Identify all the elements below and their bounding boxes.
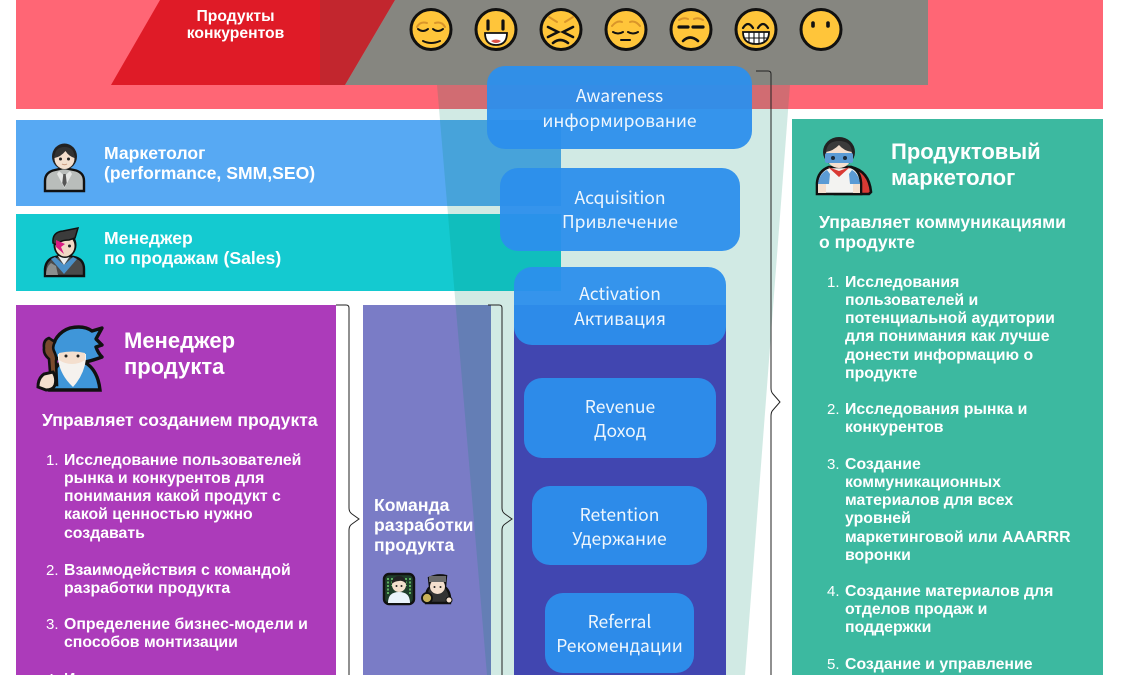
product manager subtitle: Управляет созданием продукта xyxy=(42,410,318,430)
product marketer list item 3: Создание xyxy=(845,456,921,472)
development team label: Команда xyxy=(374,494,449,514)
competitors label xyxy=(187,8,284,42)
panel: product marketer xyxy=(792,119,1103,675)
product manager list item 1: создавать xyxy=(64,524,145,542)
icon: designer xyxy=(421,574,452,604)
product marketer list item 2 xyxy=(827,400,1027,436)
text: 4. xyxy=(827,582,840,600)
competitors products shape xyxy=(111,0,395,85)
funnel stage: activation: Активация xyxy=(574,306,666,330)
icon: wizard xyxy=(36,325,104,392)
band: sales manager xyxy=(16,214,561,291)
product marketer list item 4: отделов продаж и xyxy=(845,601,987,618)
sales manager label: по продажам (Sales) xyxy=(104,248,281,268)
funnel stage: awareness xyxy=(487,66,752,149)
funnel stage: acquisition xyxy=(500,168,740,251)
product marketer list item 3 xyxy=(827,456,1071,564)
sales manager label xyxy=(104,228,281,268)
emoji row xyxy=(410,8,842,51)
competitors label: Продукты xyxy=(196,8,275,24)
customer emotions gray area xyxy=(345,0,928,85)
product marketer list item 4 xyxy=(827,582,1053,636)
product manager title xyxy=(124,328,235,379)
product marketer title xyxy=(891,139,1041,190)
product marketer list item 1: Исследования xyxy=(845,274,959,290)
product manager list item 2: Взаимодействия с командой xyxy=(64,562,291,578)
product marketer title: Продуктовый xyxy=(891,139,1041,164)
product marketer list item 1 xyxy=(827,274,1055,382)
text: 1. xyxy=(827,274,840,290)
marketer label: Маркетолог xyxy=(104,142,205,162)
product marketer list item 2: Исследования рынка и xyxy=(845,400,1027,418)
product manager list item 1 xyxy=(46,452,301,542)
marketer label: (performance, SMM,SEO) xyxy=(104,162,315,182)
funnel stage: referral: Referral xyxy=(588,608,651,634)
funnel stage: activation xyxy=(514,267,726,345)
product marketer list item 4: Создание материалов для xyxy=(845,582,1053,600)
product marketer list item 1: донести информацию о xyxy=(845,346,1033,364)
icon: marketer xyxy=(44,144,86,192)
product marketer list item 4: поддержки xyxy=(845,619,931,636)
product manager title: продукта xyxy=(124,354,224,379)
product marketer list item 3: уровней xyxy=(845,510,911,527)
product manager list item 1: понимания какой продукт с xyxy=(64,488,281,505)
icon: sales manager xyxy=(44,227,86,278)
product marketer subtitle xyxy=(819,212,1066,252)
funnel stage: acquisition: Acquisition xyxy=(574,184,666,210)
band: marketer xyxy=(16,120,561,206)
funnel stage: activation: Activation xyxy=(579,281,661,306)
text: 3. xyxy=(827,456,840,472)
text: 2. xyxy=(46,562,59,578)
text: 2. xyxy=(827,400,840,418)
product marketer list item 1: потенциальной аудитории xyxy=(845,310,1055,327)
funnel stage: retention xyxy=(532,486,707,565)
product marketer list item 2: конкурентов xyxy=(845,419,944,436)
panel: development team xyxy=(363,305,491,675)
product manager list item 3 xyxy=(46,616,308,651)
funnel stage: acquisition: Привлечение xyxy=(562,209,678,234)
product marketer list item 3: материалов для всех xyxy=(845,492,1013,509)
funnel lower block xyxy=(514,305,726,675)
development team label: продукта xyxy=(374,534,454,554)
funnel stage: revenue xyxy=(524,378,716,458)
product manager list item 2: разработки продукта xyxy=(64,580,230,597)
funnel stage: referral: Рекомендации xyxy=(556,633,683,658)
product manager list item 1: какой ценностью нужно xyxy=(64,506,253,523)
sales manager label: Менеджер xyxy=(104,228,193,248)
funnel stage: revenue: Доход xyxy=(594,418,646,443)
development team label: разработки xyxy=(374,514,473,534)
icon: developer xyxy=(382,572,416,606)
top band: market xyxy=(16,0,1103,109)
icon: superhero product marketer xyxy=(816,137,872,196)
marketer label xyxy=(104,142,315,182)
product manager list item 1: рынка и конкурентов для xyxy=(64,470,264,487)
product marketer list item 3: маркетинговой или AAARRR xyxy=(845,528,1071,546)
funnel stage: retention: Удержание xyxy=(572,526,667,551)
text: 5. xyxy=(827,656,840,672)
product manager list item 3: Определение бизнес-модели и xyxy=(64,616,308,632)
competitors label: конкурентов xyxy=(187,25,284,42)
product marketer subtitle: о продукте xyxy=(819,232,915,252)
product marketer list item 1: для понимания как лучше xyxy=(845,328,1050,345)
product marketer list item 1: пользователей и xyxy=(845,292,978,309)
text: 1. xyxy=(46,452,59,468)
product marketer list item 3: воронки xyxy=(845,547,911,564)
product manager list item 2 xyxy=(46,562,291,597)
product manager title: Менеджер xyxy=(124,328,235,353)
funnel stage: referral xyxy=(545,593,694,673)
product manager list item 3: способов монтизации xyxy=(64,634,238,651)
development team label xyxy=(374,494,473,554)
funnel stage: retention: Retention xyxy=(580,502,659,526)
funnel stage: awareness: Awareness xyxy=(576,83,663,108)
funnel stage: revenue: Revenue xyxy=(585,394,655,418)
product marketer list item 3: коммуникационных xyxy=(845,474,1001,491)
product marketer subtitle: Управляет коммуникациями xyxy=(819,212,1066,232)
funnel stage: awareness: информирование xyxy=(542,108,697,132)
product marketer list item 5: Создание и управление xyxy=(845,656,1033,672)
product marketer list item 1: продукте xyxy=(845,365,917,382)
panel: product manager xyxy=(16,305,336,675)
product marketer title: маркетолог xyxy=(891,165,1015,190)
text: 3. xyxy=(46,616,59,632)
product manager list item 1: Исследование пользователей xyxy=(64,452,301,468)
